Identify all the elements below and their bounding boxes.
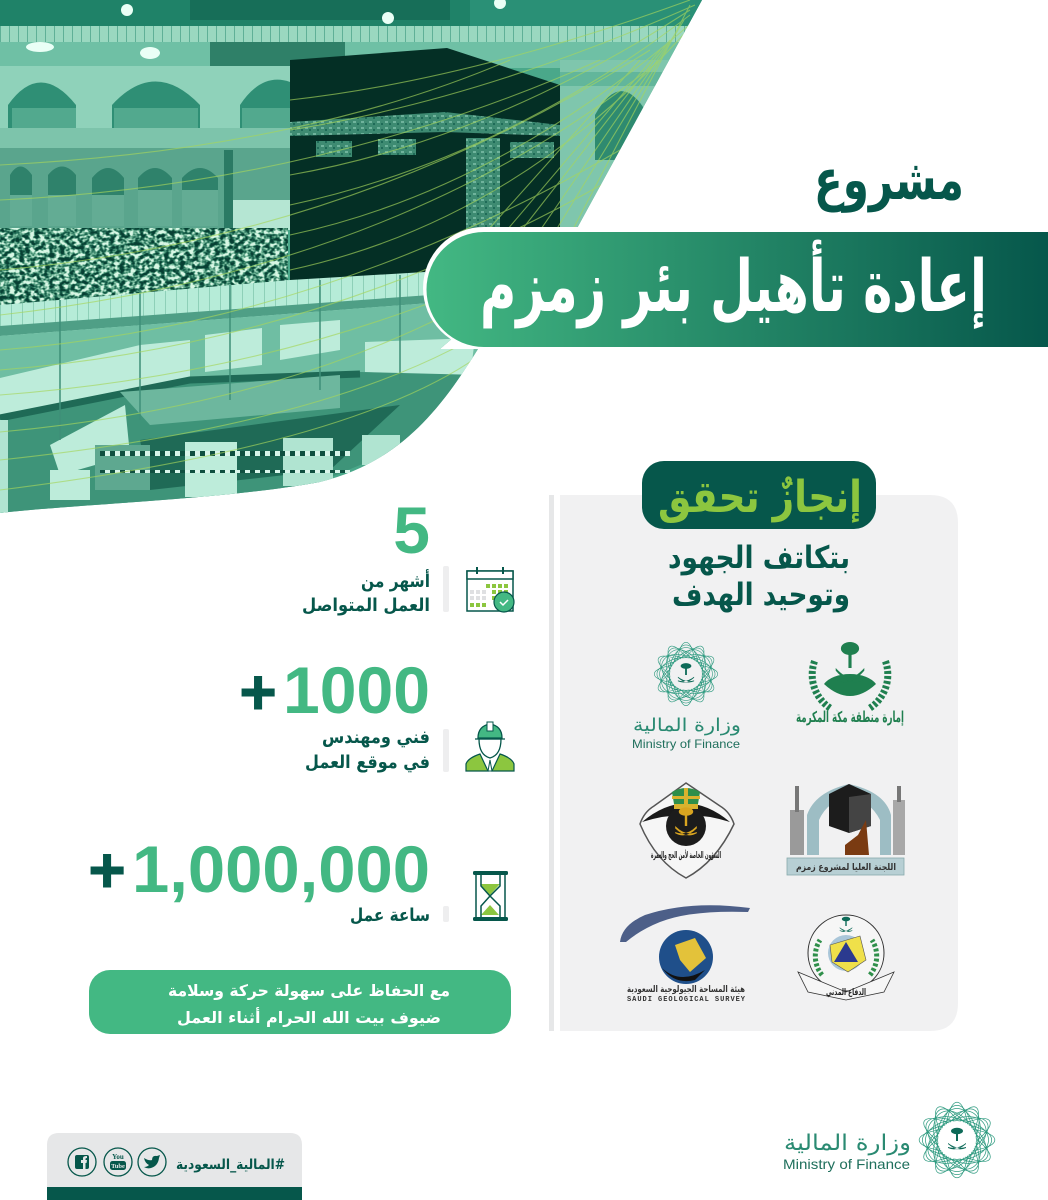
icon: worker: [466, 722, 514, 771]
stat label: ساعة عمل: [350, 905, 430, 926]
number 1,000,000+: 1,000,000: [132, 832, 430, 906]
icon: youtube: You: [112, 1153, 124, 1161]
stat label: في موقع العمل: [305, 752, 430, 773]
logo: Makkah region emirate: إمارة منطقة مكة المكرمة: [796, 708, 904, 726]
panel: partners: [560, 461, 958, 1031]
heading: project label: مشروع: [814, 148, 964, 213]
icon: facebook: [68, 1148, 96, 1176]
logo: Grand Mosque guards: الشؤون الخاصة لأمن الحج والعمرة: [651, 849, 721, 861]
logo: Saudi Geological Survey: SAUDI GEOLOGICAL SURVEY: [627, 996, 746, 1004]
panel subtitle: وتوحيد الهدف: [672, 577, 850, 613]
panel subtitle: بتكاتف الجهود: [668, 540, 850, 576]
divider bar: [549, 495, 554, 1031]
logo: Ministry of Finance: [632, 638, 741, 751]
logo: Grand Mosque guards: [640, 783, 734, 878]
stat: working hours: [88, 832, 508, 926]
stat: months of work: [302, 493, 514, 616]
stat label: [302, 569, 430, 616]
logo: Civil Defense: [798, 915, 894, 1000]
icon: calendar: [467, 567, 514, 612]
stat label: [305, 727, 430, 773]
number 1000+: +: [239, 656, 277, 728]
icon: youtube: Tube: [111, 1163, 125, 1170]
logo: Civil Defense: الدفاع المدني: [826, 988, 866, 998]
stat label: أشهر من: [361, 569, 430, 592]
achievement badge: [642, 461, 876, 529]
title banner: [423, 227, 1048, 349]
logo: Saudi Geological Survey: هيئة المساحة الجيولوجية السعودية: [627, 985, 745, 995]
achievement badge: إنجازٌ تحقق: [658, 472, 862, 523]
icon: twitter: [138, 1148, 166, 1176]
icon: youtube: [104, 1148, 132, 1176]
stat: technicians and engineers: [239, 653, 514, 773]
number 5: 5: [393, 493, 430, 567]
logo: Ministry of Finance: Ministry of Finance: [632, 737, 740, 751]
stat label: العمل المتواصل: [302, 595, 430, 616]
callout: safety note: مع الحفاظ على سهولة حركة وسلامة: [168, 981, 450, 1000]
logo: Two Holy Mosques: [787, 784, 905, 875]
hashtag: #المالية_السعودية: [176, 1157, 285, 1173]
logo: Saudi Geological Survey: [620, 905, 750, 1004]
icon: hourglass: [473, 871, 508, 921]
callout: safety note: [89, 970, 511, 1034]
callout: safety note: ضيوف بيت الله الحرام أثناء العمل: [177, 1007, 441, 1027]
logo: Two Holy Mosques: اللجنة العليا لمشروع زمزم: [796, 863, 896, 873]
number 1000+: 1000: [283, 653, 430, 727]
logo: Ministry of Finance footer: [783, 1097, 1000, 1183]
number 1,000,000+: +: [88, 834, 126, 906]
logo: Ministry of Finance footer: وزارة المالية: [784, 1131, 911, 1156]
hero photo: Kaaba and works: [0, 0, 710, 515]
logo: Ministry of Finance: وزارة المالية: [633, 715, 741, 736]
stat label: فني ومهندس: [322, 727, 430, 748]
footer: social bar: [47, 1133, 302, 1200]
logo: Ministry of Finance footer: Ministry of Finance: [783, 1156, 910, 1172]
logo: Makkah region emirate: [796, 642, 904, 726]
panel subtitle: [668, 540, 850, 613]
